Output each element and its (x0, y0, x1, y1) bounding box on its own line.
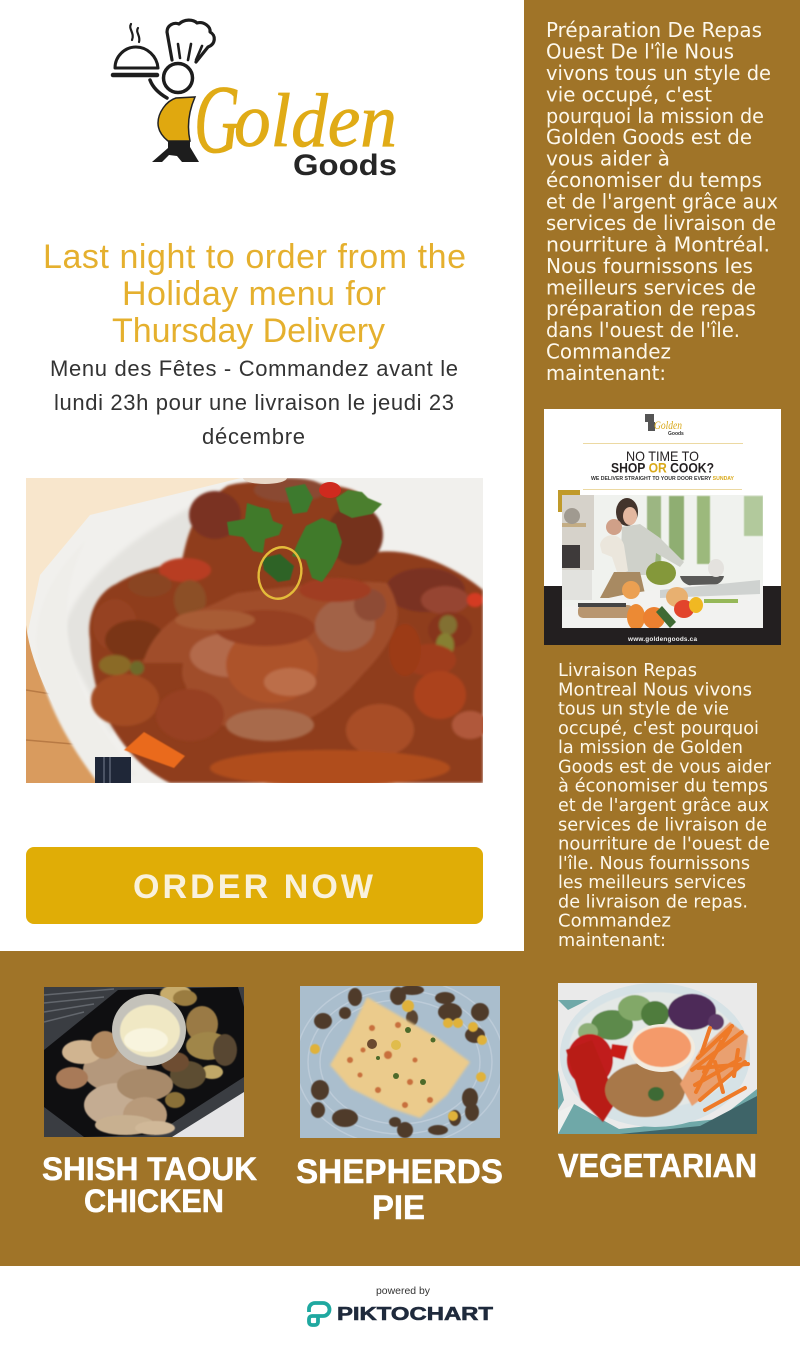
icon: piktochart mark (309, 1303, 330, 1325)
text block: préparation de repas: Commandez (546, 340, 671, 364)
text block: holiday menu note: Menu des Fêtes - Commandez avant le (50, 356, 458, 381)
icon: chef body (158, 97, 195, 141)
text block: préparation de repas: économiser du temps (546, 168, 762, 192)
text block: préparation de repas: pourquoi la mission de (546, 104, 764, 128)
stew (89, 478, 488, 786)
counter and vegetables (609, 584, 718, 598)
text block: préparation de repas: et de l'argent grâce aux (546, 190, 778, 214)
footer: powered by piktochart (309, 1285, 493, 1325)
ad photo: mother cooking in kitchen (562, 495, 763, 630)
parsley (227, 484, 382, 582)
text block: livraison repas montreal: les meilleurs services (558, 873, 746, 893)
text block: holiday menu note: décembre (202, 424, 305, 449)
text block: holiday menu note: lundi 23h pour une livraison le jeudi 23 (54, 390, 454, 415)
text block: livraison repas montreal: Commandez (558, 912, 671, 932)
heading: last night to order: Holiday menu for (122, 275, 386, 313)
ad subline: WE DELIVER STRAIGHT TO YOUR DOOR EVERY SUNDAY (591, 476, 734, 482)
text block: préparation de repas: Préparation De Repas (546, 18, 762, 42)
text block: préparation de repas: vivons tous un style de (546, 61, 771, 85)
central shank (143, 578, 398, 741)
ad headline: NO TIME TO (626, 448, 699, 464)
button: order now (26, 847, 483, 924)
caption: shish taouk chicken: CHICKEN (84, 1183, 224, 1219)
ad logo (645, 414, 684, 437)
icon: chef carrying a cloche (113, 20, 214, 98)
lemon twist (257, 546, 303, 600)
text block: préparation de repas: vous aider à (546, 147, 670, 171)
ad logo: Goods (668, 431, 684, 437)
text block: livraison repas montreal: nourriture de l'ouest de (558, 835, 770, 855)
caption: shepherds pie (296, 1153, 503, 1227)
image: shish taouk chicken in black tray (44, 985, 244, 1137)
text block: livraison repas montreal: Montreal Nous vivons (558, 680, 752, 700)
footer: powered by piktochart: powered by (376, 1285, 431, 1297)
text block: livraison repas montreal: Livraison Repas (558, 661, 697, 681)
caption: vegetarian: VEGETARIAN (558, 1147, 757, 1184)
logo word: Golden: olden (234, 79, 397, 163)
image: no time to shop or cook advert (544, 409, 781, 645)
text block: livraison repas montreal: Goods est de vous aider (558, 757, 772, 777)
heading: last night to order: Last night to order from the (43, 238, 466, 276)
icon: chef legs (152, 141, 199, 162)
logo word: Golden: G (194, 66, 240, 174)
ad logo: Golden (654, 418, 682, 432)
text block: holiday menu note (50, 356, 458, 449)
text block: livraison repas montreal: tous un style de vie (558, 700, 729, 720)
image: shepherds pie on blue plate (300, 986, 500, 1138)
text block: préparation de repas: Golden Goods est de (546, 125, 752, 149)
image: no time to shop or cook advert: www.goldengoods.ca (627, 636, 697, 643)
text block: préparation de repas: préparation de repas (546, 297, 756, 321)
logo: Golden Goods (113, 20, 397, 182)
logo word: Golden (194, 66, 397, 174)
footer: powered by piktochart: PIKTOCHART (337, 1304, 493, 1324)
text block: préparation de repas: Nous fournissons les (546, 254, 753, 278)
image: braised veal stew in white bowl (26, 472, 488, 787)
text block: livraison repas montreal (558, 661, 772, 951)
plate inner shade (68, 510, 192, 730)
text block: préparation de repas: dans l'ouest de l'île. (546, 318, 740, 342)
text block: livraison repas montreal: de livraison de repas. (558, 892, 748, 912)
text block: livraison repas montreal: services de livraison de (558, 815, 767, 835)
napkin (95, 757, 131, 783)
text block: livraison repas montreal: occupé, c'est pourquoi (558, 719, 759, 739)
caption: shish taouk chicken (42, 1151, 257, 1219)
caption: shepherds pie: PIE (372, 1189, 425, 1227)
text block: préparation de repas: nourriture à Montréal. (546, 232, 770, 256)
text block: préparation de repas: Ouest De l'île Nous (546, 39, 734, 63)
text block: livraison repas montreal: maintenant: (558, 931, 666, 951)
text block: préparation de repas: vie occupé, c'est (546, 82, 712, 106)
text block: préparation de repas: services de livraison de (546, 211, 776, 235)
text block: livraison repas montreal: la mission de Golden (558, 738, 743, 758)
woman and baby (616, 498, 638, 526)
ad headline (611, 448, 714, 476)
heading: last night to order (43, 238, 466, 350)
caption: shepherds pie: SHEPHERDS (296, 1153, 503, 1191)
text block: livraison repas montreal: et de l'argent grâce aux (558, 796, 769, 816)
panel: bottom brown band (0, 951, 800, 1266)
image: vegetarian bowl (558, 983, 757, 1134)
button: order now: ORDER NOW (133, 868, 374, 906)
panel: right brown column (524, 0, 800, 951)
text block: livraison repas montreal: l'île. Nous fournissons (558, 854, 750, 874)
ad headline: SHOP OR COOK? (611, 460, 714, 476)
carrot (124, 732, 185, 768)
text block: livraison repas montreal: à économiser du temps (558, 777, 768, 797)
logo word: Goods: Goods (293, 149, 397, 182)
text block: préparation de repas (546, 18, 778, 385)
caption: shish taouk chicken: SHISH TAOUK (42, 1151, 257, 1187)
text block: préparation de repas: meilleurs services de (546, 275, 756, 299)
heading: last night to order: Thursday Delivery (112, 312, 385, 350)
text block: préparation de repas: maintenant: (546, 361, 666, 385)
